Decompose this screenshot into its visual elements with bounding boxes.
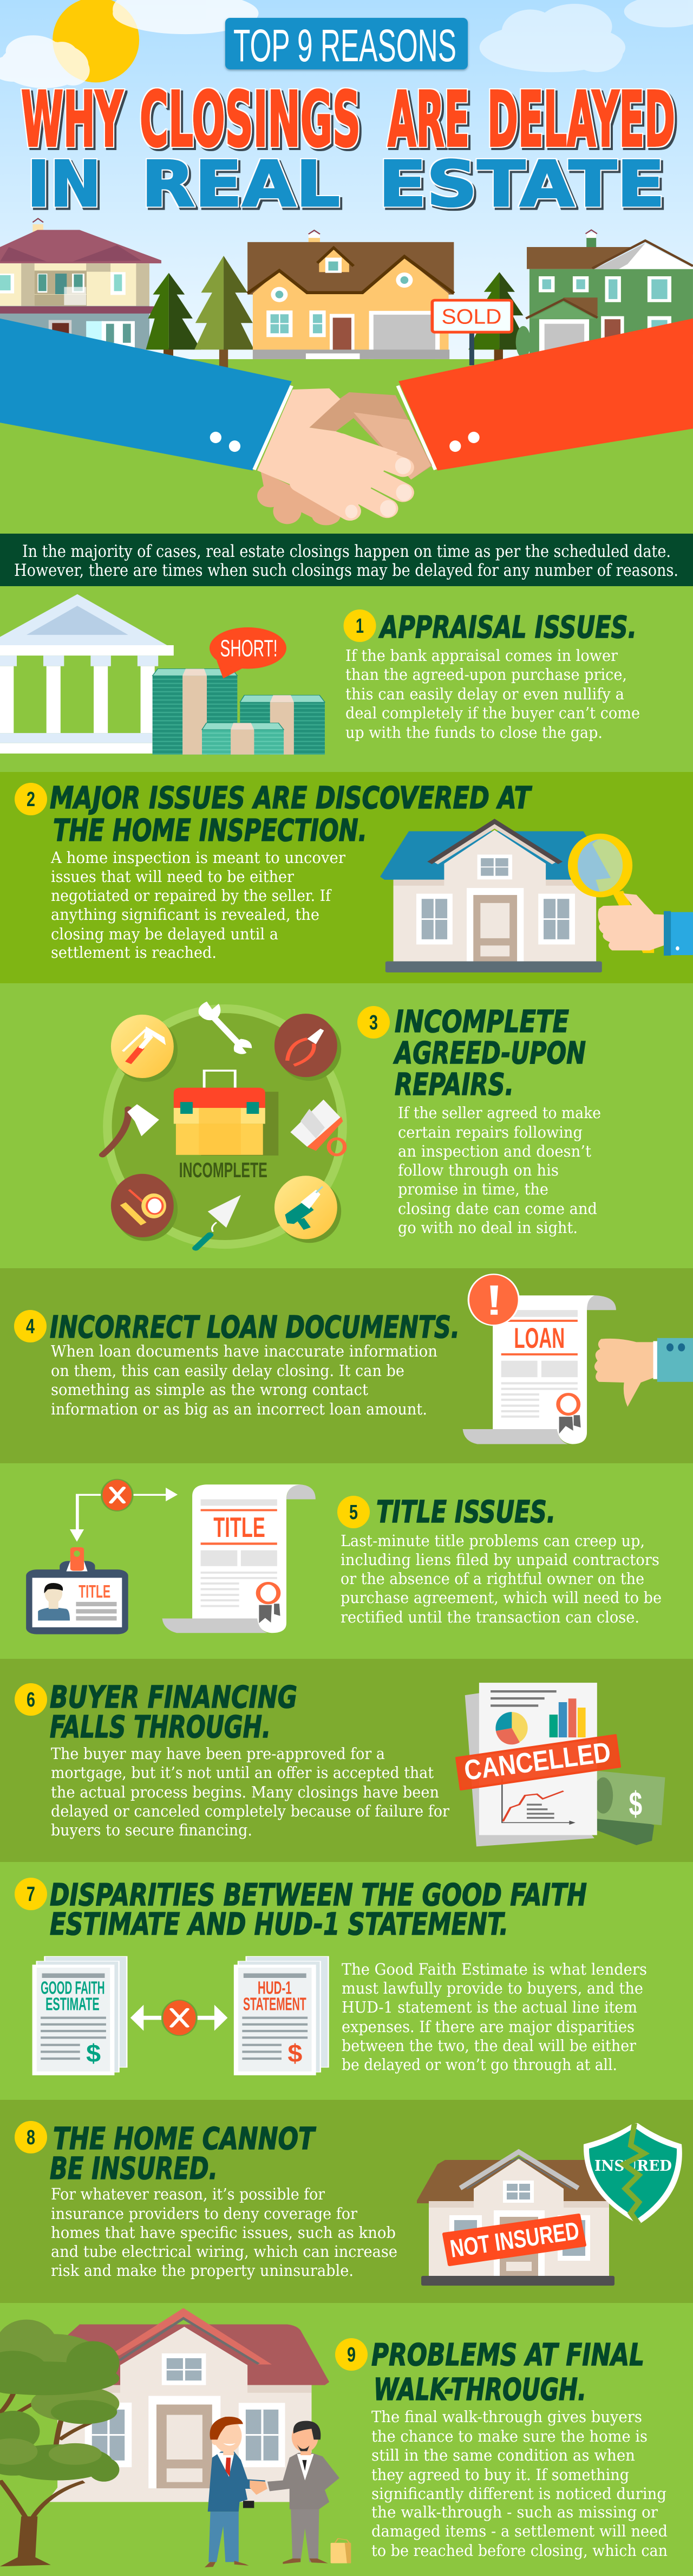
text block 4: information or as big as an incorrect loan amount. [51, 1400, 427, 1418]
icon: middle house [247, 230, 454, 359]
heading 3: AGREED-UPON [393, 1036, 586, 1071]
text block 7: HUD-1 statement is the actual line item [342, 1998, 637, 2016]
icon: papers and cash: $ [629, 1785, 642, 1823]
heading 3: REPAIRS. [395, 1067, 514, 1102]
icon: briefcase bag [331, 2539, 351, 2563]
text block 9: they agreed to buy it. If something [371, 2465, 629, 2484]
intro band [0, 534, 693, 586]
heading 3: INCOMPLETE [395, 1004, 569, 1040]
heading 8: BE INSURED. [50, 2151, 218, 2186]
text block 3: If the seller agreed to make [398, 1104, 601, 1122]
panel: reason 5 title issues [0, 1463, 693, 1659]
text block 2: issues that will need to be either [51, 867, 294, 886]
panel: reason 7 disparities: ESTIMATE [45, 1994, 100, 2015]
icon: left house [0, 218, 161, 351]
heading 6 [50, 1680, 297, 1745]
badge 6 [15, 1683, 47, 1716]
text block 9 [371, 2408, 668, 2560]
panel: reason 7 disparities [0, 1862, 693, 2100]
badge 3: 3 [369, 1011, 378, 1034]
heading 6: FALLS THROUGH. [50, 1710, 271, 1745]
badge 6: 6 [27, 1689, 35, 1711]
text block 5: purchase agreement, which will need to be [341, 1588, 662, 1607]
text block 5: including liens filed by unpaid contractors [341, 1550, 659, 1569]
badge 4 [14, 1310, 47, 1342]
text block 8: homes that have specific issues, such as knob [51, 2223, 396, 2242]
text block 4: When loan documents have inaccurate information [51, 1342, 437, 1360]
icon: title document: TITLE [213, 1512, 265, 1543]
text block 6: the actual process begins. Many closings have been [51, 1783, 439, 1801]
icon: pliers coin [274, 1014, 337, 1077]
panel: reason 1 appraisal issues [0, 586, 693, 772]
heading 2: MAJOR ISSUES ARE DISCOVERED AT [50, 781, 532, 816]
text block 6: buyers to secure financing. [51, 1821, 252, 1839]
stamp: cancelled: CANCELLED [462, 1736, 612, 1787]
text block 1: If the bank appraisal comes in lower [345, 646, 618, 665]
icon: title document [162, 1484, 316, 1633]
panel: reason 3 incomplete repairs [0, 983, 693, 1268]
text block 4 [51, 1342, 437, 1418]
icon: loan document with alert and thumb down: LOAN [514, 1322, 565, 1354]
icon: tree [0, 2320, 119, 2566]
badge 9 [335, 2338, 368, 2371]
badge 1 [343, 609, 376, 642]
text block 9: to be reached before closing, which can [371, 2541, 668, 2560]
text block 8: For whatever reason, it’s possible for [51, 2185, 325, 2203]
icon: tape and pencil coin [111, 1174, 174, 1237]
badge 4: 4 [26, 1315, 35, 1338]
heading 8 [50, 2121, 316, 2186]
icon: arrows and blocked x [70, 1480, 178, 1542]
text block 8: and tube electrical wiring, which can increase [51, 2242, 397, 2261]
icon: toolbox [174, 1070, 278, 1156]
icon: sold sign [432, 300, 512, 365]
icon: bank and cash stacks: SHORT! [220, 635, 278, 662]
text block 6: delayed or canceled completely because of failure for [51, 1802, 449, 1820]
text block 5: or the absence of a rightful owner on the [341, 1569, 644, 1588]
text block 9: significantly different is noticed during [371, 2484, 666, 2503]
text block 9: the walk-through - such as missing or [371, 2503, 658, 2521]
text block 7: The Good Faith Estimate is what lenders [342, 1960, 647, 1978]
badge 5 [337, 1496, 370, 1528]
icon: uninsured house [417, 2152, 618, 2286]
panel: reason 9 final walk-through [0, 2303, 693, 2576]
text block 3: promise in time, the [398, 1180, 548, 1198]
stamp: not insured [444, 2215, 585, 2264]
badge 8: 8 [27, 2126, 35, 2149]
icon: double arrow with x [130, 2000, 227, 2035]
panel: reason 7 disparities: STATEMENT [243, 1994, 306, 2015]
text block 3: an inspection and doesn’t [398, 1142, 591, 1160]
badge 7 [15, 1878, 47, 1910]
badge 8 [15, 2121, 47, 2153]
text block 4: on them, this can easily delay closing. It can be [51, 1361, 404, 1380]
icon: cracked shield [584, 2123, 682, 2224]
icon: axe [102, 1104, 159, 1155]
text block 4: something as simple as the wrong contact [51, 1380, 368, 1399]
icon: two businessmen shaking hands [205, 2417, 351, 2567]
text block 6: mortgage, but it’s not until an offer is accepted that [51, 1763, 434, 1782]
heading 8: THE HOME CANNOT [53, 2121, 316, 2157]
text block 2: closing may be delayed until a [51, 925, 278, 943]
text block 9: The final walk-through gives buyers [371, 2408, 642, 2426]
badge 2: 2 [27, 788, 35, 811]
icon: id badge: TITLE [79, 1581, 110, 1601]
text block 1: than the agreed-upon purchase price, [345, 665, 627, 684]
icon: good faith estimate document [32, 1956, 127, 2075]
title: in real estate: IN [27, 148, 101, 221]
icon: wrench [199, 1002, 252, 1054]
text block 7: be delayed or won’t go through at all. [342, 2055, 617, 2074]
panel: header hero [0, 0, 693, 534]
text block 2: anything significant is revealed, the [51, 905, 319, 924]
badge 3 [357, 1006, 390, 1039]
icon: hud-1 statement document: HUD-1 [258, 1978, 292, 1998]
heading 4: INCORRECT LOAN DOCUMENTS. [50, 1310, 460, 1345]
text block 7: between the two, the deal will be either [342, 2036, 636, 2055]
icon: cracked shield: INSURED [594, 2158, 672, 2175]
badge 5: 5 [349, 1501, 358, 1524]
title: in real estate: REAL [141, 148, 340, 221]
icon: house [47, 2308, 329, 2502]
icon: pine trees [146, 256, 531, 368]
banner: top 9 reasons [225, 18, 468, 71]
text block 8: risk and make the property uninsurable. [51, 2261, 354, 2280]
text block 3 [398, 1104, 601, 1237]
heading 3 [393, 1004, 586, 1102]
icon: trowel [196, 1195, 241, 1248]
icon: id badge [26, 1547, 128, 1634]
badge 2 [15, 783, 47, 815]
panel: reason 8 home cannot be insured [0, 2100, 693, 2303]
icon: handshake [250, 2481, 267, 2495]
icon: hud-1 statement document [234, 1956, 329, 2075]
text block 8: insurance providers to deny coverage for [51, 2204, 357, 2223]
icon: house with magnifier [380, 821, 693, 972]
icon: papers and cash [465, 1683, 665, 1846]
text block 8 [51, 2185, 397, 2280]
heading 7: ESTIMATE AND HUD-1 STATEMENT. [50, 1907, 508, 1942]
text block 6 [51, 1744, 449, 1839]
icon: loan document with alert and thumb down [463, 1274, 693, 1444]
heading 6: BUYER FINANCING [50, 1680, 297, 1715]
text block 9: the chance to make sure the home is [371, 2427, 648, 2445]
panel: reason 2 home inspection [0, 772, 693, 983]
text block 7: must lawfully provide to buyers, and the [342, 1979, 643, 1997]
icon: sun and clouds [0, 0, 693, 88]
icon: hammer coin [111, 1015, 174, 1078]
text block 2 [50, 848, 345, 962]
text block 9: damaged items - a settlement will need [371, 2522, 668, 2540]
text block 2: A home inspection is meant to uncover [50, 848, 345, 867]
title: why closings are delayed: CLOSINGS [140, 76, 361, 164]
title: why closings are delayed: ARE [388, 76, 469, 164]
icon: man in blue suit [205, 2417, 265, 2567]
text block 3: certain repairs following [398, 1123, 583, 1141]
icon: right house [516, 230, 693, 358]
text block 2: settlement is reached. [51, 943, 217, 962]
heading 7 [50, 1878, 587, 1942]
badge 9: 9 [347, 2344, 356, 2366]
text block 5: Last-minute title problems can creep up, [341, 1532, 645, 1550]
title: why closings are delayed [21, 76, 675, 164]
icon: sold sign: SOLD [441, 305, 502, 329]
icon: hud-1 statement document: $ [287, 2039, 302, 2067]
icon: drill coin [274, 1176, 337, 1239]
icon: man in grey suit [267, 2421, 339, 2564]
banner: top 9 reasons: TOP 9 REASONS [233, 20, 456, 71]
text block 5 [341, 1532, 662, 1626]
panel: reason 4 loan documents [0, 1268, 693, 1463]
badge 7: 7 [27, 1883, 35, 1906]
title: in real estate [27, 148, 665, 221]
title: in real estate: ESTATE [378, 148, 665, 221]
text block 1: deal completely if the buyer can’t come [345, 704, 640, 722]
text block 1: this can easily delay or even nullify a [345, 685, 624, 703]
text block 7: expenses. If there are major disparities [342, 2017, 635, 2036]
text block 7 [342, 1960, 647, 2074]
heading 5: TITLE ISSUES. [376, 1495, 555, 1530]
heading 2: THE HOME INSPECTION. [53, 813, 367, 848]
text block 1: up with the funds to close the gap. [345, 723, 603, 742]
icon: toolbox and tools circle [102, 1002, 347, 1249]
icon: toolbox and tools circle: INCOMPLETE [179, 1159, 267, 1182]
panel: reason 7 disparities: GOOD FAITH [41, 1978, 104, 1998]
icon: bank and cash stacks [0, 594, 325, 755]
text block 3: follow through on his [398, 1161, 559, 1179]
text block 6: The buyer may have been pre-approved for a [51, 1744, 385, 1763]
text block 2: negotiated or repaired by the seller. If [51, 886, 332, 905]
text block 1 [345, 646, 640, 742]
text block 3: go with no deal in sight. [398, 1218, 578, 1237]
heading 9 [371, 2338, 644, 2408]
text block 9: still in the same condition as when [371, 2446, 635, 2464]
badge 1: 1 [356, 615, 364, 638]
heading 9: WALK-THROUGH. [374, 2372, 586, 2408]
text block 5: rectified until the transaction can close. [341, 1608, 639, 1626]
text block 3: closing date can come and [398, 1199, 597, 1218]
icon: good faith estimate document: $ [86, 2039, 101, 2067]
panel: reason 6 buyer financing [0, 1659, 693, 1862]
stamp: not insured: NOT INSURED [448, 2216, 581, 2263]
icon: scraper [290, 1100, 345, 1155]
title: why closings are delayed: WHY [21, 76, 123, 164]
icon: handshake [0, 319, 693, 525]
heading 2 [50, 781, 532, 848]
